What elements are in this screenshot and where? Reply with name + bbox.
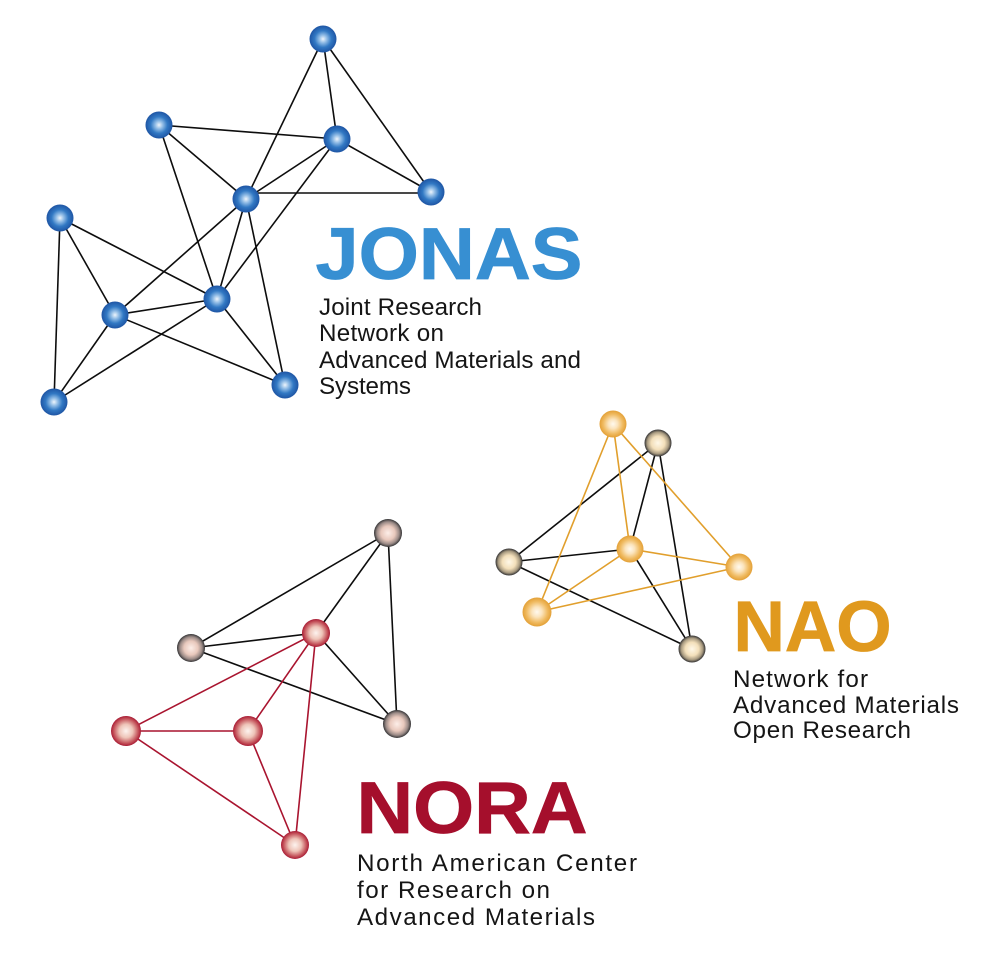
JONAS sphere nodes: [40, 26, 444, 416]
NAO black lines: [509, 443, 692, 649]
heading: JONAS: JONAS: [316, 214, 582, 295]
description: JONAS full name: Network on: [319, 320, 444, 347]
NAO orange lines: [537, 424, 739, 612]
NORA red lines: [126, 633, 316, 845]
description: NAO full name: Network for: [733, 666, 868, 693]
network diagram: JONAS: [40, 26, 444, 416]
network diagram: NAO: [496, 410, 752, 662]
heading: NORA: NORA: [356, 768, 588, 849]
NORA black lines: [191, 533, 397, 724]
NORA red nodes: [111, 619, 330, 859]
JONAS connecting lines: [54, 39, 431, 402]
description: NAO full name: [733, 666, 959, 744]
description: NORA full name: Advanced Materials: [357, 904, 595, 931]
description: NORA full name: [357, 850, 637, 931]
description: JONAS full name: Advanced Materials and: [319, 347, 581, 374]
description: NAO full name: Open Research: [733, 717, 911, 744]
description: JONAS full name: Systems: [319, 373, 411, 400]
description: NORA full name: for Research on: [357, 877, 550, 904]
network diagram: NORA: [111, 519, 411, 859]
NORA black-rimmed nodes: [177, 519, 411, 738]
description: NAO full name: Advanced Materials: [733, 692, 959, 719]
panel: JONAS network group: [40, 26, 582, 416]
heading: NAO: NAO: [734, 588, 892, 667]
description: JONAS full name: [319, 294, 581, 400]
NAO orange nodes: [522, 410, 752, 626]
description: JONAS full name: Joint Research: [319, 294, 482, 321]
NAO black-rimmed nodes: [496, 430, 706, 662]
panel: NORA network group: [111, 519, 637, 931]
description: NORA full name: North American Center: [357, 850, 637, 877]
panel: NAO network group: [496, 410, 959, 744]
